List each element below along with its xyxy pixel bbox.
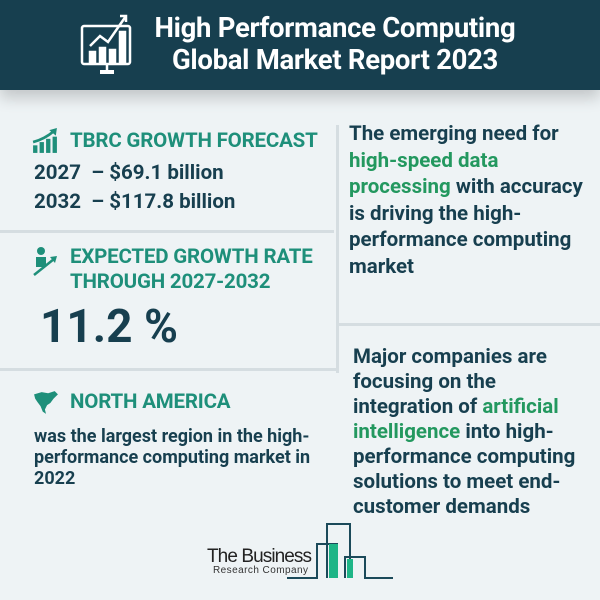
icon: growth bars bbox=[32, 128, 57, 153]
panel: trend: focusing on the bbox=[353, 370, 496, 394]
big number: 11.2 % bbox=[40, 300, 178, 354]
panel: trend: performance computing bbox=[353, 445, 575, 469]
panel: trend: solutions to meet end- bbox=[353, 470, 561, 494]
heading: TBRC GROWTH FORECAST bbox=[70, 129, 318, 153]
panel: driver: high-speed data bbox=[349, 148, 498, 172]
panel: forecast bbox=[32, 128, 318, 214]
panel: driver: performance computing bbox=[349, 228, 571, 252]
values bbox=[34, 161, 235, 214]
values: 2032 – $117.8 billion bbox=[34, 190, 235, 214]
panel: driver: processing with accuracy bbox=[349, 175, 583, 199]
header bbox=[0, 0, 600, 90]
panel: trend: intelligence into high- bbox=[353, 420, 554, 444]
divider lines bbox=[0, 230, 334, 233]
logo: The Business bbox=[207, 546, 312, 567]
heading: THROUGH 2027-2032 bbox=[70, 270, 270, 294]
panel: north america bbox=[34, 390, 310, 489]
logo bbox=[207, 523, 393, 579]
panel: driver: market bbox=[349, 254, 414, 278]
panel: trend: customer demands bbox=[353, 495, 530, 519]
icon: map bbox=[34, 391, 58, 414]
panel: trend: integration of artificial bbox=[353, 395, 559, 419]
values: 2027 – $69.1 billion bbox=[34, 161, 224, 185]
text bbox=[34, 426, 310, 489]
panel: trend: Major companies are bbox=[353, 345, 547, 369]
icon: monitor chart bbox=[80, 14, 132, 74]
panel: trend bbox=[353, 345, 575, 519]
heading: NORTH AMERICA bbox=[70, 390, 230, 414]
panel: driver bbox=[349, 122, 583, 278]
text: was the largest region in the high- bbox=[34, 426, 309, 447]
text: 2022 bbox=[34, 468, 75, 489]
icon: person arrow bbox=[33, 247, 57, 276]
logo: Research Company bbox=[213, 565, 308, 576]
title: High Performance Computing bbox=[155, 11, 515, 44]
title: Global Market Report 2023 bbox=[172, 43, 498, 76]
title bbox=[155, 11, 515, 76]
panel: growth rate bbox=[33, 245, 313, 354]
text: performance computing market in bbox=[34, 447, 310, 468]
heading: EXPECTED GROWTH RATE bbox=[70, 245, 313, 269]
panel: driver: The emerging need for bbox=[349, 122, 559, 146]
panel: driver: is driving the high- bbox=[349, 202, 521, 226]
heading bbox=[70, 245, 313, 294]
